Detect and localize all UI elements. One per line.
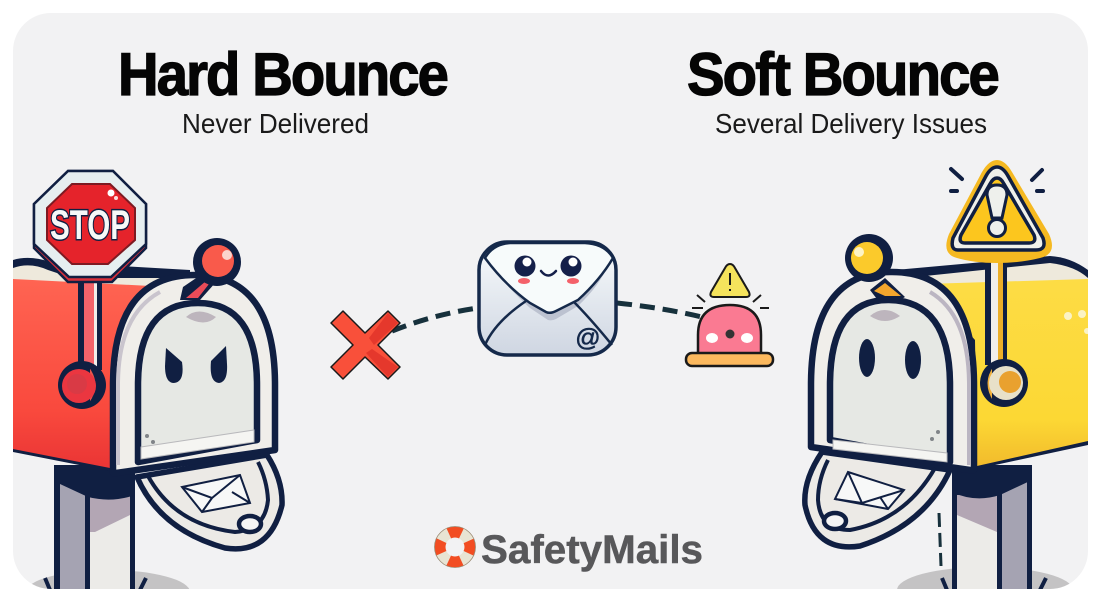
illustration: red mailbox with stop sign (13, 171, 282, 600)
eyes (514, 256, 536, 276)
post (942, 465, 1046, 595)
mailbox body (895, 256, 1090, 470)
icon: alarm bell with warning (686, 264, 773, 366)
dashed drop line (939, 513, 941, 566)
heading: Soft Bounce: Soft Bounce (687, 41, 999, 108)
post (45, 465, 146, 595)
mail flap (805, 452, 950, 547)
mail flap (137, 455, 282, 549)
illustration: yellow mailbox with warning sign (805, 160, 1090, 600)
icon: smiling envelope (479, 242, 616, 355)
heading: Hard Bounce: Hard Bounce (118, 41, 448, 108)
door (811, 272, 974, 470)
warning sign (946, 160, 1052, 263)
angry eyes (165, 348, 183, 383)
cheeks (518, 278, 530, 284)
wordmark: SafetyMails (481, 528, 703, 572)
ground shadow (32, 571, 189, 589)
alert rays (951, 169, 1043, 191)
door (113, 275, 275, 473)
subheading: Several Delivery Issues: Several Delivery Issues (715, 108, 987, 139)
mailbox body (13, 258, 190, 472)
ground shadow (897, 568, 1070, 589)
smile (541, 271, 556, 276)
warning sign pole (980, 255, 1028, 407)
stop sign (34, 171, 146, 282)
flag (180, 238, 241, 300)
logo: SafetyMails (434, 526, 703, 572)
arrow: dashed path to alarm (617, 303, 706, 318)
stop sign pole (58, 270, 106, 409)
arrow: dashed path to red X (392, 308, 478, 331)
at sign: @ (575, 324, 601, 352)
calm eyes (859, 339, 875, 377)
icon: lifebuoy (434, 526, 476, 568)
flag (845, 234, 905, 303)
subheading: Never Delivered: Never Delivered (182, 108, 369, 139)
exclamation mark (987, 185, 1007, 218)
label: STOP: STOP (50, 201, 130, 248)
icon: red X (331, 311, 400, 379)
